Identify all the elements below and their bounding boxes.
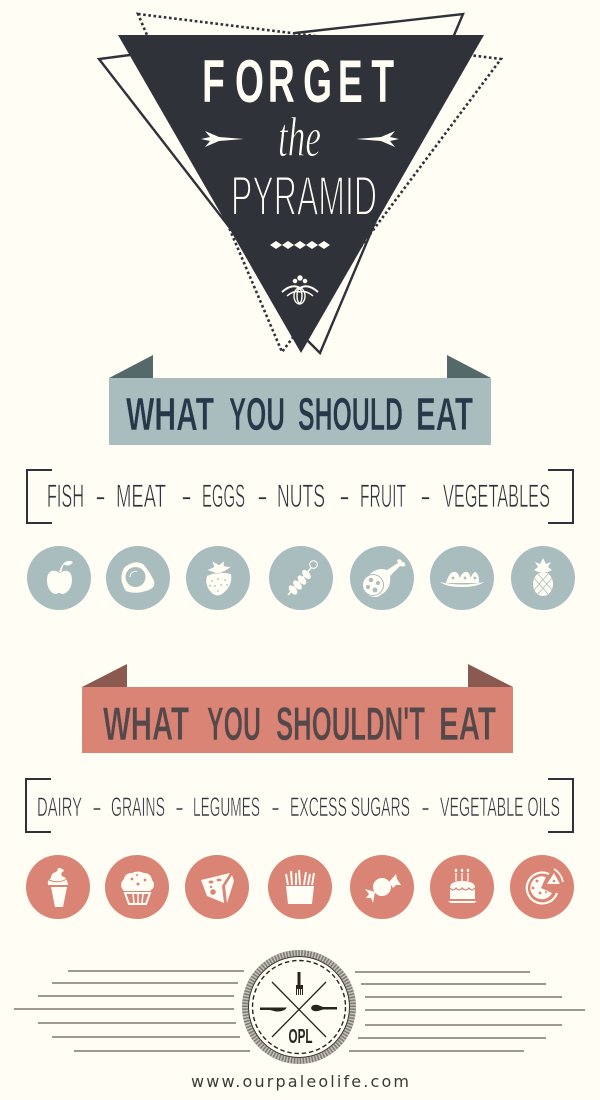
list text: - [181, 478, 192, 514]
website url: www.ourpaleolife.com [191, 1072, 409, 1091]
food list: should eat [27, 470, 573, 523]
main dark triangle [118, 35, 484, 353]
icon: fries [268, 855, 332, 919]
badge text: OPL [288, 1026, 312, 1048]
icon: kebab skewer [269, 546, 333, 610]
list text: - [257, 478, 268, 514]
icon: strawberry [186, 546, 250, 610]
icon: pineapple [511, 546, 575, 610]
list text: - [421, 792, 430, 822]
right bracket [548, 779, 573, 832]
heading: WHAT [103, 697, 189, 750]
ornament: left arrow [201, 131, 244, 147]
icon: apple [27, 546, 91, 610]
footer lines [14, 971, 585, 1051]
list text: GRAINS [111, 792, 165, 822]
heading [126, 388, 473, 440]
heading: EAT [416, 388, 473, 440]
heading: WHAT [126, 388, 214, 440]
spoon [311, 1005, 337, 1011]
icon: muffin [105, 855, 169, 919]
list text: FRUIT [360, 478, 406, 514]
icon row: foods to eat [27, 546, 575, 610]
icon: pizza [510, 855, 574, 919]
heading: SHOULDN'T [276, 697, 425, 750]
heading: the: the [278, 107, 321, 169]
heading: FORGET: FORGET [202, 48, 394, 115]
list text: - [339, 478, 350, 514]
ribbon [82, 687, 513, 753]
ornament: flourish [282, 276, 318, 304]
icon: ice cream [26, 855, 90, 919]
right fold [468, 664, 513, 687]
list text [47, 478, 550, 514]
list text: - [175, 792, 184, 822]
icon row: foods to avoid [26, 855, 574, 919]
banner: what you should eat [109, 355, 491, 445]
icon: birthday cake [430, 855, 494, 919]
icon: ham [350, 546, 414, 610]
left fold [109, 355, 153, 378]
left fold [82, 664, 127, 687]
list text: MEAT [116, 478, 166, 514]
right bracket [548, 470, 573, 523]
heading [103, 697, 496, 750]
icon: candy [350, 855, 414, 919]
food list: shouldn't eat [26, 779, 573, 832]
knife [260, 1008, 287, 1012]
icon: cheese wedge [185, 855, 249, 919]
list text: DAIRY [37, 792, 82, 822]
icon: plate of food [430, 546, 494, 610]
list text: - [420, 478, 431, 514]
fork [296, 972, 303, 995]
left bracket [26, 779, 51, 832]
ornament: right arrow [356, 131, 399, 147]
heading: SHOULD [298, 388, 403, 440]
dotted outline triangle [138, 14, 501, 352]
heading: YOU [207, 697, 261, 750]
list text: - [92, 792, 102, 822]
heading: PYRAMID: PYRAMID [231, 164, 377, 227]
logo badge: OPL [245, 953, 353, 1061]
list text: - [95, 478, 106, 514]
icon: fried egg [106, 546, 170, 610]
list text: FISH [47, 478, 84, 514]
list text: - [271, 792, 280, 822]
list text: EGGS [202, 478, 245, 514]
banner: what you shouldn't eat [82, 664, 513, 753]
ornament: diamonds [270, 241, 330, 249]
list text: EXCESS SUGARS [290, 792, 410, 822]
left bracket [27, 470, 52, 523]
list text: NUTS [277, 478, 325, 514]
crossed lines [272, 982, 326, 1037]
rope ring [245, 953, 353, 1061]
title emblem: layered triangles with heading [99, 14, 501, 353]
heading: EAT [439, 697, 496, 750]
ribbon [109, 378, 491, 445]
list text [37, 792, 560, 822]
dashed ring [252, 960, 346, 1054]
list text: LEGUMES [193, 792, 260, 822]
heading: YOU [229, 388, 285, 440]
solid outline triangle strokes [99, 14, 463, 353]
right fold [447, 355, 491, 378]
